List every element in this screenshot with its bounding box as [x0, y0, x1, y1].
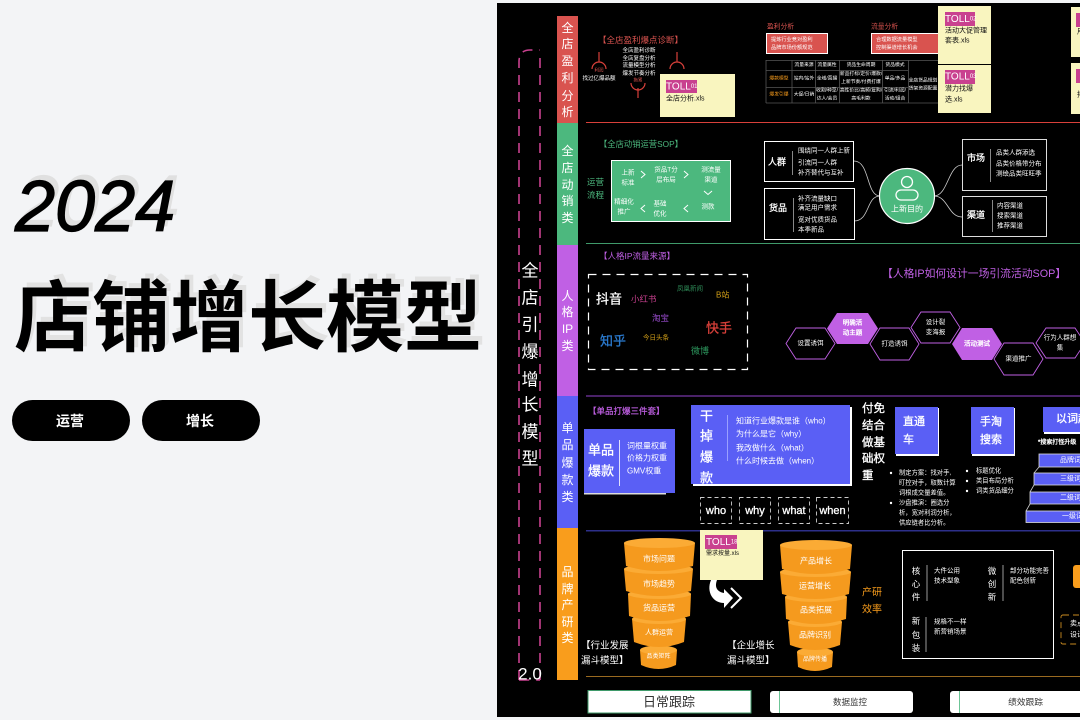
box: crowd: 补齐替代与互补 [798, 168, 844, 176]
tags: who why what when: who [705, 505, 726, 517]
diagnosis list: 全店复盘分析 [622, 54, 656, 62]
center circle: launch goal: 上新目的 [891, 204, 923, 214]
box: product innovation: 配色创新 [1010, 576, 1036, 584]
word cloud: traffic platforms: 小红书 [631, 294, 657, 304]
box: product innovation: 核 [912, 566, 921, 576]
icon: profit arc right [670, 52, 684, 69]
icon: profit arc middle: 拖累 [634, 76, 643, 84]
vertical model title with dashed bracket: 增 [522, 370, 538, 390]
callout: profit analysis [766, 34, 828, 54]
box: beat the hit product: 为什么是它（why） [736, 428, 806, 438]
label: R&D efficiency [862, 586, 882, 616]
label: operations flow: 运营 [587, 177, 604, 187]
sidebar: brand R&D: 产 [561, 598, 574, 612]
bullets: through train [890, 468, 956, 526]
sidebar: brand R&D: 牌 [561, 582, 574, 596]
text: paid and free: 结合 [862, 418, 885, 432]
bullets: through train: 供应链者比分析。 [899, 518, 949, 526]
stair: keyword levels [1026, 438, 1080, 522]
box: goods: 本季新品 [798, 224, 824, 234]
text: paid and free: 做基 [862, 435, 885, 449]
box: market [962, 140, 1046, 190]
box: crowd: 人群 [768, 156, 786, 167]
sidebar: hit products: 品 [561, 438, 574, 452]
text: paid and free [862, 401, 885, 482]
funnel: industry development: 市场趋势 [643, 578, 675, 588]
box: through train: 直通 [903, 414, 925, 428]
box: through train [895, 407, 939, 456]
sidebar: store sales: 销 [561, 194, 574, 208]
note: TOLL03: TOLL03 [945, 72, 977, 82]
table: analysis grid: 收割/种草/ [816, 86, 839, 94]
box: keyword [1043, 407, 1080, 434]
table: analysis grid: 全域/直播 [817, 74, 837, 82]
funnel: enterprise growth [780, 540, 852, 671]
hex flow: activity steps: 渠道推广 [1006, 354, 1032, 362]
label: enterprise funnel: 【企业增长 [727, 640, 775, 652]
table: analysis grid: 大促/日销 [794, 90, 814, 98]
box: product innovation: 规格不一样 [934, 616, 967, 626]
box: beat the hit product: 什么时候去做（when） [736, 456, 819, 466]
table: analysis grid: 上新节奏/付费打爆 [841, 78, 881, 85]
label: industry funnel: 漏斗模型】 [581, 654, 629, 666]
table: analysis grid: 新品打标/定价/爆款/ [840, 70, 883, 77]
sidebar: brand R&D [557, 528, 578, 680]
box: product innovation: 大件公用 [934, 566, 960, 574]
flow box: 层布局 [656, 174, 676, 184]
flow box: 渠道 [704, 174, 718, 184]
table: analysis grid: 高性价比/高频/复购/ [840, 86, 883, 94]
box: goods: 补齐流量缺口 [798, 194, 837, 202]
vertical model title with dashed bracket: 长 [522, 396, 538, 414]
text: paid and free: 重 [862, 468, 874, 482]
note: TOLL02 [938, 6, 991, 64]
box: product innovation: 心 [912, 579, 921, 589]
hex flow: activity steps: 行为人群想 [1044, 332, 1077, 342]
hex flow: activity steps: 打造诱饵 [882, 338, 908, 348]
sidebar: store sales [557, 123, 578, 245]
heading: hit product kit: 【单品打爆三件套】 [588, 406, 665, 416]
box: goods: 满足用户需求 [798, 202, 838, 212]
tags: who why what when: when [818, 505, 846, 517]
funnel: enterprise growth: 品牌传播 [803, 655, 827, 663]
note: TOLL02: 活动大促管理 [945, 26, 987, 34]
note: TOLL01 [660, 74, 735, 117]
bullets: mobile search: 类目布局分析 [976, 476, 1014, 484]
word cloud: traffic platforms [588, 274, 748, 370]
footer: performance tracking: 绩效跟踪 [1008, 696, 1043, 707]
sidebar: hit products [557, 396, 578, 528]
box: beat the hit product: 干 [700, 408, 713, 424]
sidebar: hit products: 单 [561, 421, 574, 435]
table: analysis grid: 流量来源 [794, 61, 814, 68]
flow box: 优化 [654, 208, 667, 218]
label: enterprise funnel [727, 640, 775, 666]
bullets: mobile search: 标题优化 [976, 466, 1002, 474]
flow box: 精细化 [614, 196, 634, 206]
word cloud: traffic platforms: 抖音 [596, 292, 622, 306]
sidebar: personal IP: 格 [561, 304, 574, 319]
label: industry funnel [581, 640, 629, 666]
cover: tag pills: 运营 [56, 413, 84, 429]
heading: profit diagnosis: 【全店盈利爆点诊断】 [598, 35, 683, 45]
footer: performance tracking [950, 691, 1080, 713]
box: mobile search [971, 407, 1015, 456]
funnel: enterprise growth: 运营增长 [799, 580, 831, 590]
table: analysis grid: 引流/利润/ [884, 86, 907, 94]
diagnosis list: 全店盈利诊断 [622, 46, 656, 54]
sidebar: brand R&D: 研 [561, 615, 574, 629]
box: channel: 推荐渠道 [997, 220, 1024, 230]
callout: profit analysis: 品牌市场份额规范 [771, 43, 813, 51]
box: goods: 货品 [769, 202, 787, 213]
sidebar: brand R&D: 类 [561, 631, 574, 645]
cover: main title: 店铺增长模型 [18, 269, 486, 357]
box: product innovation: 部分功能完善 [1010, 566, 1050, 574]
box: beat the hit product: 我改做什么（what） [736, 442, 809, 452]
hex flow: activity steps: 设置诱饵 [798, 338, 824, 347]
box: product innovation: 新 [912, 616, 921, 626]
word cloud: traffic platforms: 快手 [706, 320, 732, 336]
callout: traffic analysis: 合理数据流量模型 [876, 35, 918, 43]
box: channel: 渠道 [967, 209, 985, 220]
callout: traffic analysis [872, 34, 942, 54]
flow box: 货品T分 [654, 164, 678, 174]
word cloud: traffic platforms: B站 [716, 290, 729, 300]
vertical model title with dashed bracket: 引 [522, 316, 538, 334]
box: single hit product: 价格力权重 [627, 452, 667, 462]
box: single hit product: 爆款 [588, 464, 614, 478]
bullets: mobile search: 词类货品细分 [976, 486, 1014, 494]
box: product innovation: 微 [988, 566, 997, 576]
funnel: industry development: 品类矩阵 [646, 652, 671, 660]
box: product innovation [902, 550, 1054, 658]
sidebar: store profit analysis: 盈 [561, 54, 574, 68]
hex flow: activity steps [786, 312, 1080, 375]
heading: traffic analysis: 流量分析 [871, 22, 898, 30]
funnel: industry development: 市场问题 [643, 554, 675, 564]
dark poster panel [497, 3, 1080, 717]
bullets: through train: 制定方案：找对手, [899, 468, 951, 476]
sidebar: store profit analysis: 利 [561, 71, 574, 85]
funnel: industry development: 人群运营 [645, 628, 673, 636]
sidebar: hit products: 类 [561, 490, 574, 504]
note: TOLL18 [700, 530, 763, 580]
table: analysis grid: 货品模式 [885, 61, 905, 68]
icon: curved arrow [709, 580, 741, 608]
hex flow: activity steps: 集 [1057, 342, 1064, 352]
table: analysis grid: 流量属性 [817, 61, 837, 68]
sidebar: store sales: 类 [561, 211, 574, 225]
vertical model title with dashed bracket: 2.0 [518, 664, 542, 684]
tags: who why what when: what [781, 505, 806, 517]
vertical model title with dashed bracket: 模 [522, 422, 538, 442]
box: goods [764, 188, 854, 240]
flow box [612, 160, 730, 222]
box: crowd [764, 142, 854, 182]
footer: data monitoring: 数据监控 [833, 697, 867, 707]
table: analysis grid: 全店货品规划 [909, 76, 938, 84]
callout: traffic analysis: 控制渠道增长机会 [876, 43, 918, 51]
label: R&D efficiency: 效率 [862, 602, 882, 616]
flow box: 推广 [618, 206, 631, 216]
box: mobile search: 搜索 [980, 432, 1002, 446]
cover: tag pills: 增长 [186, 413, 214, 429]
heading: IP traffic sources: 【人格IP流量来源】 [599, 251, 675, 261]
hex flow: activity steps: 明确活 [843, 318, 863, 326]
notes: cropped at right edge [1071, 7, 1080, 114]
flow box: 测款 [702, 202, 715, 210]
funnel: industry development [624, 538, 695, 669]
label: R&D efficiency: 产研 [862, 586, 882, 598]
sidebar: brand R&D: 品 [561, 565, 574, 579]
cover: year heading: 2024 [14, 167, 175, 247]
box: market: 品类价格带分布 [996, 158, 1042, 168]
table: analysis grid: 爆款模型 [769, 74, 789, 82]
cover: tag pills [12, 400, 260, 441]
box: channel: 搜索渠道 [997, 210, 1024, 220]
diagnosis list [622, 46, 656, 77]
sidebar: store sales: 动 [561, 178, 574, 192]
box: through train: 车 [903, 432, 914, 446]
label: operations flow [587, 177, 605, 200]
callout: profit analysis: 提炼行业竞对盈利 [771, 35, 813, 43]
sidebar: store sales: 全 [561, 143, 574, 158]
center circle: launch goal [880, 168, 934, 224]
label: operations flow: 流程 [587, 190, 605, 200]
text: billion hit: 找过亿爆品额 [582, 74, 616, 82]
flow box: 标准 [622, 178, 635, 186]
vertical model title with dashed bracket: 全 [522, 262, 538, 280]
table: analysis grid [766, 60, 938, 103]
flow box: 上新 [622, 168, 635, 176]
box: market: 品类人群添选 [996, 148, 1036, 156]
note: TOLL18: TOLL18 [706, 537, 738, 548]
hex flow: activity steps: 动主题 [843, 328, 863, 336]
box: beat the hit product: 款 [700, 470, 713, 486]
box: crowd: 引流同一人群 [798, 158, 838, 166]
sidebar: personal IP: IP [562, 322, 573, 336]
box: mobile search: 手淘 [980, 414, 1002, 428]
flow box: 基础 [654, 198, 667, 208]
stair: keyword levels: *搜索打怪升级 [1038, 438, 1076, 446]
hex flow: activity steps: 设计裂 [926, 317, 946, 326]
funnel: enterprise growth: 品类拓展 [800, 604, 832, 614]
box: single hit product: 单品 [588, 442, 614, 458]
icon: profit arc left: 利润 [594, 66, 604, 74]
box: single hit product: GMV权重 [627, 466, 661, 476]
sidebar: hit products: 爆 [561, 456, 574, 470]
note: TOLL03: 潜力找爆 [945, 84, 973, 92]
table: analysis grid: 货架资源配置 [909, 84, 938, 92]
heading: sales SOP: 【全店动销运营SOP】 [599, 139, 683, 149]
flow box: 测流量 [701, 164, 721, 174]
box: channel [962, 196, 1046, 236]
icon: profit arc middle [631, 76, 645, 98]
box: product innovation: 包 [912, 630, 921, 640]
word cloud: traffic platforms: 知乎 [600, 334, 626, 348]
box: product innovation: 创 [988, 579, 996, 589]
box: product innovation: 新 [988, 592, 997, 602]
vertical model title with dashed bracket: 店 [522, 288, 538, 308]
box: beat the hit product: 掉 [700, 428, 713, 444]
note: TOLL01: 全店分析.xls [666, 94, 705, 102]
orange tag cropped at edge [1073, 565, 1080, 588]
text: paid and free: 付免 [862, 401, 885, 415]
funnel: enterprise growth: 品牌识别 [799, 630, 831, 640]
box: beat the hit product [691, 405, 852, 486]
box: product innovation: 件 [912, 592, 921, 602]
bullets: through train: 沙盘推演：圈选分 [899, 498, 950, 506]
footer: data monitoring [770, 691, 913, 713]
funnel: industry development: 货品运营 [643, 602, 675, 612]
footer: daily tracking: 日常跟踪 [643, 694, 695, 710]
tags: who why what when [700, 498, 848, 524]
table: analysis grid: 达人/会员 [817, 94, 837, 102]
bullets: through train: 词根成交量差值。 [899, 488, 949, 496]
bullets: through train: 盯控对手，取数计算 [899, 478, 956, 486]
table: analysis grid: 活动/组合 [885, 94, 905, 102]
bullets: through train: 析，宽对利润分析， [899, 508, 956, 516]
diagnosis list: 爆发节奏分析 [622, 69, 656, 77]
sidebar: personal IP: 人 [561, 289, 574, 303]
vertical model title with dashed bracket: 型 [522, 450, 538, 468]
cover: year heading: 2024 [18, 162, 179, 242]
heading: IP activity SOP: 【人格IP如何设计一场引流活动SOP】 [882, 266, 1066, 280]
note: TOLL03: 选.xls [945, 94, 963, 104]
note: TOLL02: 套表.xls [945, 36, 970, 44]
box: single hit product: 词根量权重 [627, 440, 667, 450]
table: analysis grid: 站内/站外 [794, 74, 814, 82]
box: product innovation: 技术型象 [934, 576, 960, 584]
box: product innovation: 新营销场景 [934, 626, 967, 636]
sidebar: store profit analysis [557, 16, 578, 123]
table: analysis grid: 爆发引爆 [769, 90, 789, 98]
icon: profit arc left [592, 52, 606, 74]
diagnosis list: 流量模型分析 [622, 61, 656, 69]
box: goods: 宽对优质货品 [798, 214, 837, 224]
word cloud: traffic platforms: 今日头条 [643, 332, 670, 342]
funnel: enterprise growth: 产品增长 [800, 556, 832, 566]
box: single hit product [584, 429, 675, 494]
box: beat the hit product: 爆 [700, 450, 713, 464]
label: enterprise funnel: 漏斗模型】 [727, 654, 775, 666]
dashed box: selling points [1061, 615, 1080, 644]
note: TOLL01: TOLL01 [666, 82, 698, 92]
sidebar: store profit analysis: 店 [561, 37, 574, 51]
note: TOLL18: 需求按量.xls [706, 549, 739, 557]
label: industry funnel: 【行业发展 [581, 640, 629, 652]
box: beat the hit product: 知道行业爆款是谁（who） [736, 416, 831, 426]
sidebar: store sales: 店 [561, 161, 574, 175]
table: analysis grid: 单品/多品 [885, 74, 905, 82]
cover: main title: 店铺增长模型 [14, 274, 482, 362]
sidebar: store profit analysis: 全 [561, 20, 574, 35]
heading: profit analysis: 盈利分析 [767, 22, 794, 30]
box: market: 测绘品类旺旺季 [996, 168, 1042, 178]
vertical model title with dashed bracket: 爆 [522, 342, 538, 362]
hex flow: activity steps: 活动测试 [964, 338, 990, 348]
sidebar: hit products: 款 [561, 473, 574, 487]
box: market: 市场 [967, 152, 985, 163]
mind map connectors [854, 161, 962, 221]
bullets: mobile search [966, 466, 1014, 494]
note: TOLL03 [938, 65, 991, 113]
table: analysis grid: 高毛利款 [851, 94, 871, 102]
hex flow: activity steps: 变海报 [926, 327, 946, 336]
note: TOLL02: TOLL02 [945, 14, 977, 25]
box: channel: 内容渠道 [997, 200, 1024, 210]
box: product innovation: 装 [912, 643, 921, 653]
box: crowd: 围绕同一人群上新 [798, 146, 850, 154]
sidebar: store profit analysis: 分 [561, 89, 574, 103]
vertical model title with dashed bracket [518, 50, 542, 684]
sidebar: personal IP [557, 245, 578, 396]
word cloud: traffic platforms: 微博 [691, 345, 709, 356]
word cloud: traffic platforms: 凤凰新闻 [677, 284, 703, 292]
footer: daily tracking [588, 690, 751, 713]
text: paid and free: 础权 [862, 452, 885, 465]
table: analysis grid: 货品生命周期 [847, 61, 876, 68]
sidebar: store profit analysis: 析 [561, 105, 574, 119]
tags: who why what when: why [744, 505, 765, 517]
word cloud: traffic platforms: 淘宝 [652, 313, 669, 323]
sidebar: personal IP: 类 [561, 339, 574, 353]
